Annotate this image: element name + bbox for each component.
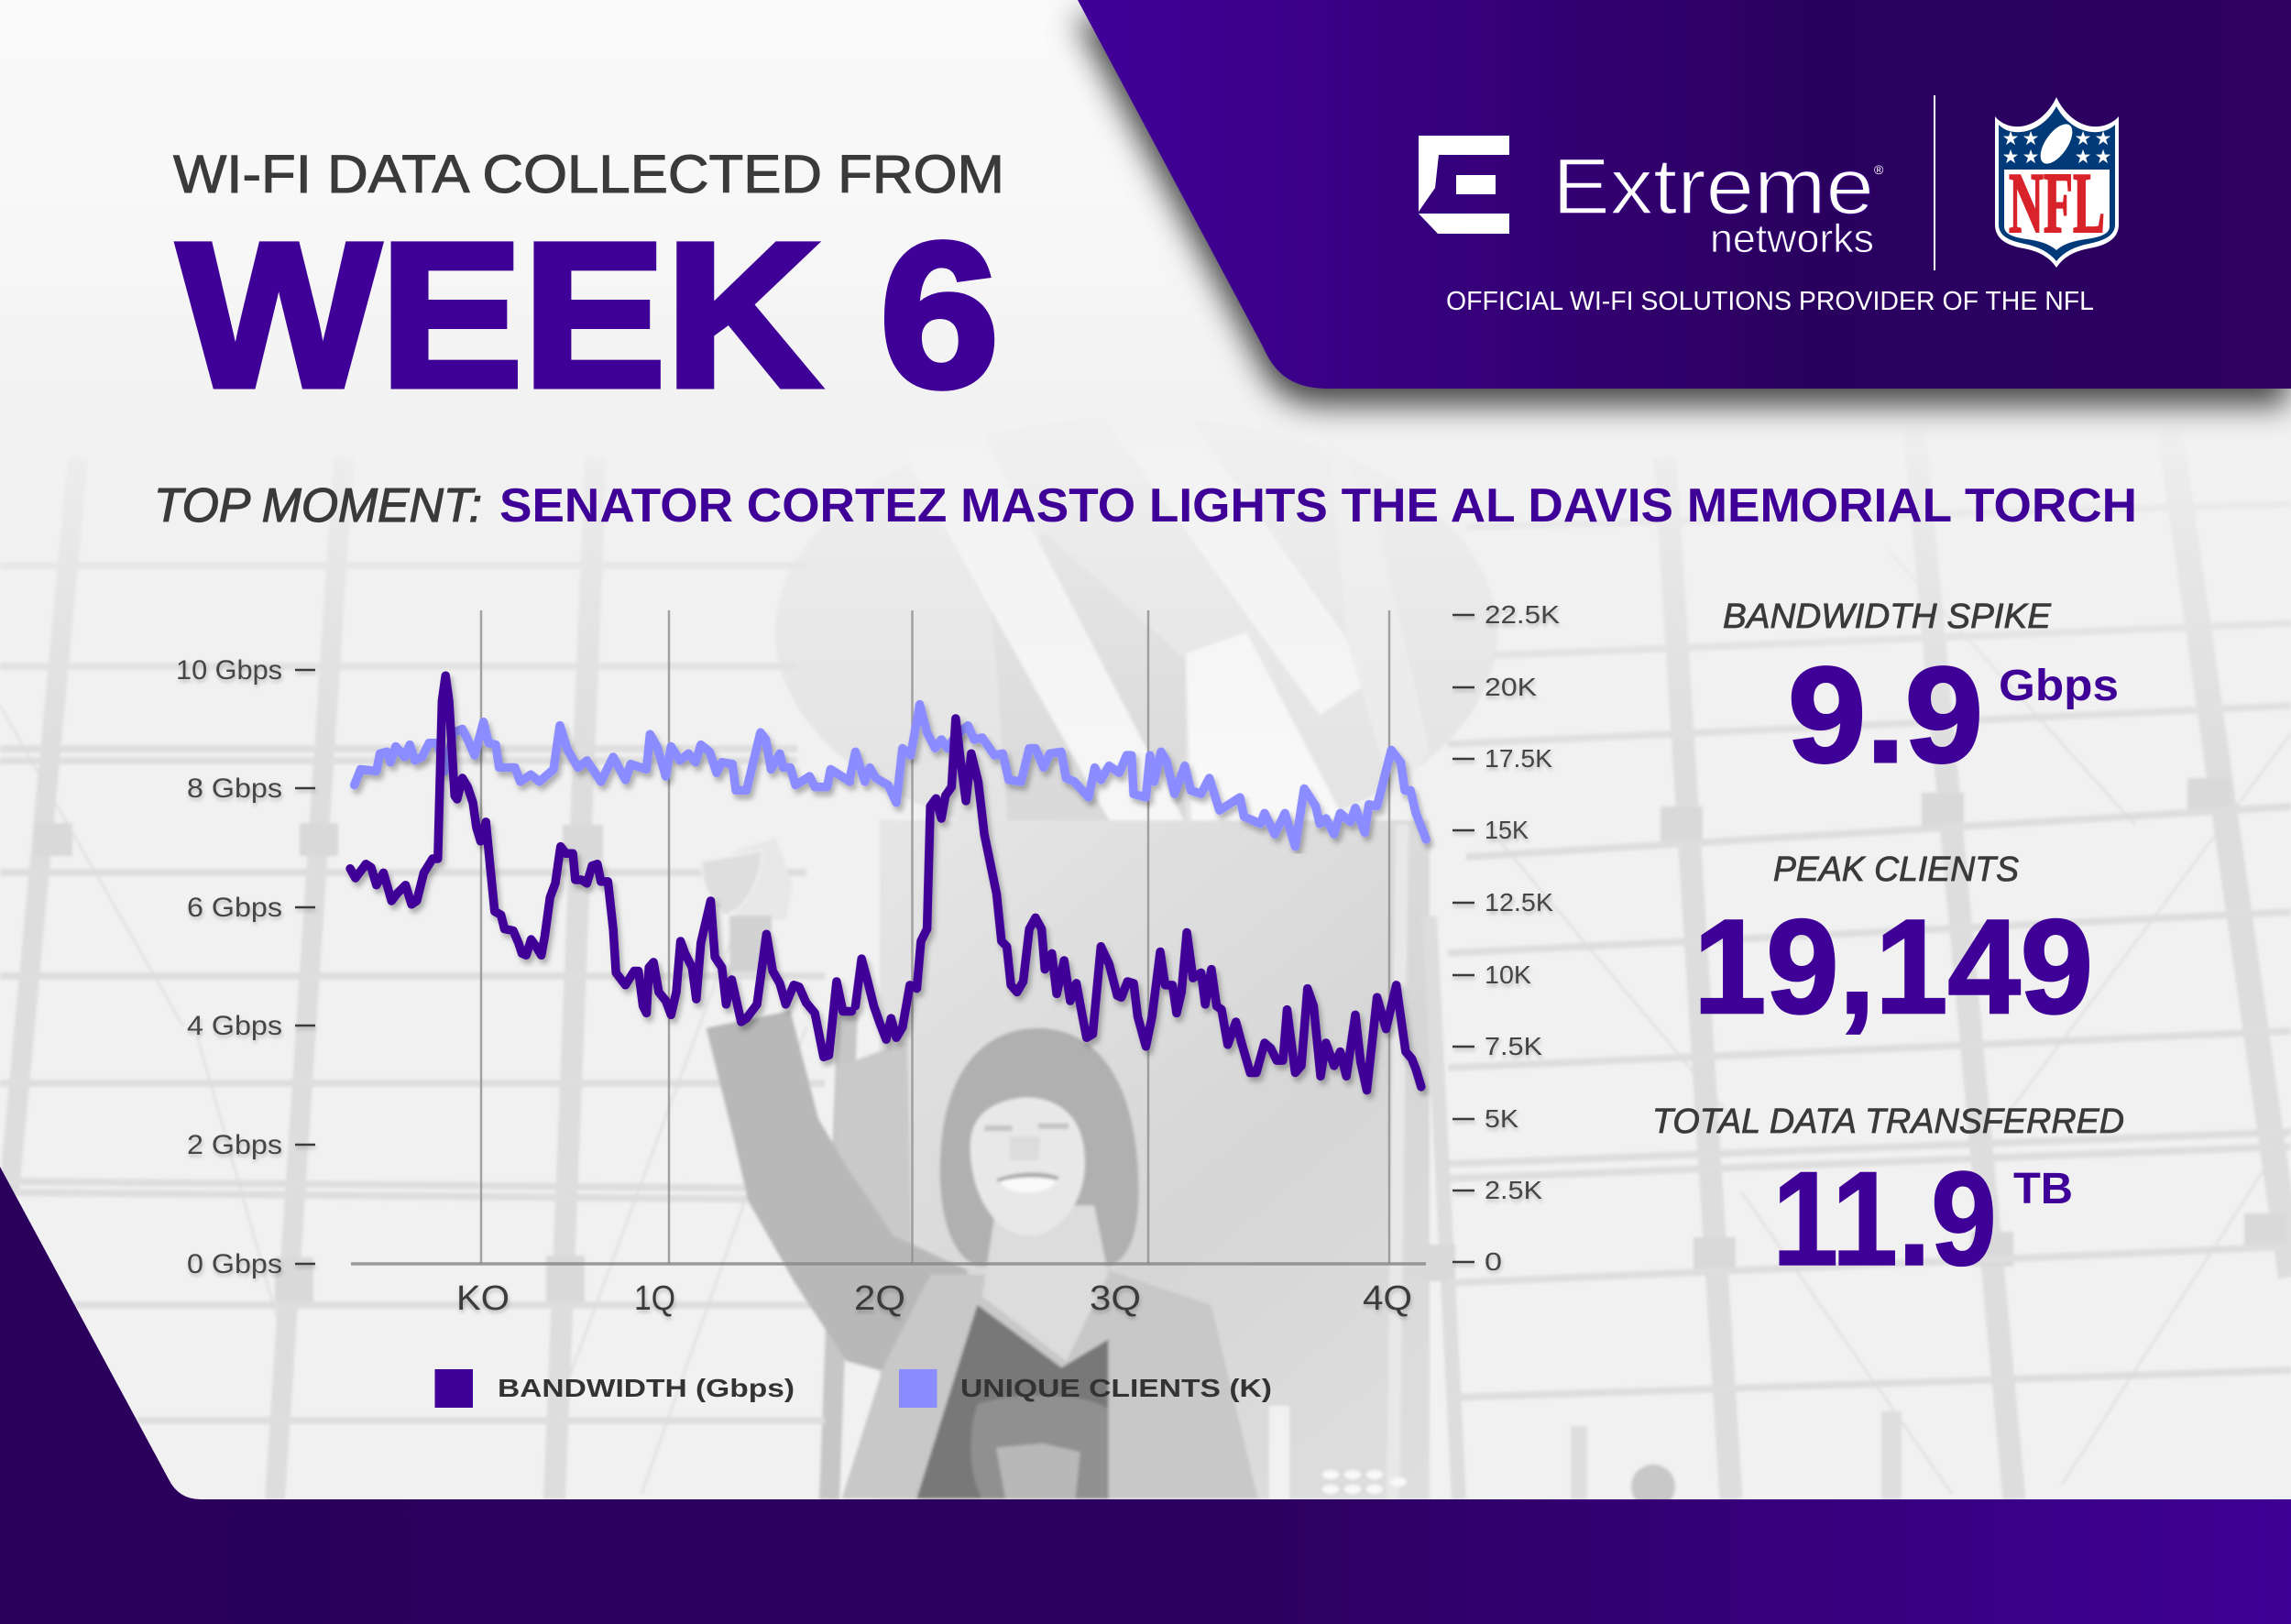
shield white panel bbox=[2004, 170, 2110, 250]
shield stars: ★ bbox=[2022, 128, 2039, 149]
header panel bbox=[1078, 0, 2291, 389]
stat: total data transferred: 11.9 bbox=[1772, 1144, 1997, 1293]
stat: bandwidth spike: 9.9 bbox=[1788, 640, 1983, 791]
shield stars: ★ bbox=[2095, 147, 2111, 168]
icon: football bbox=[2034, 119, 2078, 169]
shield stars: ★ bbox=[2022, 147, 2039, 168]
shield navy field bbox=[1999, 106, 2115, 261]
x axis line bbox=[351, 1262, 1426, 1266]
legend bbox=[434, 1369, 1272, 1408]
logo: Extreme Networks: ® bbox=[1874, 162, 1884, 177]
torch bowl bbox=[775, 412, 1497, 852]
right axis: clients bbox=[1452, 600, 1560, 1276]
right axis: clients: 15K bbox=[1485, 816, 1529, 844]
shield white outline bbox=[1995, 97, 2119, 268]
shield stars: ★ bbox=[2075, 128, 2091, 149]
torch handle bbox=[729, 916, 772, 971]
left axis: Gbps: 0 Gbps bbox=[187, 1249, 282, 1279]
x axis quarter labels: 4Q bbox=[1363, 1279, 1412, 1318]
line series: bandwidth bbox=[350, 675, 1421, 1091]
torch column bbox=[880, 820, 1430, 1499]
stat: bandwidth spike: Gbps bbox=[1999, 662, 2119, 710]
stat: bandwidth spike: BANDWIDTH SPIKE bbox=[1723, 598, 2052, 636]
bottom band and left triangle bbox=[0, 1167, 2291, 1624]
logo divider bbox=[1934, 95, 1935, 270]
header small title: WI-FI DATA COLLECTED FROM bbox=[173, 145, 1004, 204]
top moment headline: SENATOR CORTEZ MASTO LIGHTS THE AL DAVIS MEMORIAL TORCH bbox=[499, 479, 2137, 532]
fist bbox=[734, 838, 793, 920]
shirt bbox=[916, 1305, 1108, 1498]
NFL wordmark: NFL bbox=[2009, 156, 2105, 251]
right axis: clients: 2.5K bbox=[1485, 1176, 1542, 1204]
chart: bandwidth and unique clients over game bbox=[176, 600, 1560, 1408]
main title: WEEK 6 bbox=[178, 201, 999, 430]
top moment headline: TOP MOMENT: bbox=[154, 479, 482, 532]
structural beams bbox=[9, 431, 2291, 1499]
legend: BANDWIDTH (Gbps) bbox=[498, 1374, 795, 1402]
x axis quarter labels: 1Q bbox=[634, 1279, 675, 1318]
dark panel behind the person bbox=[837, 1041, 912, 1266]
right axis: clients: 20K bbox=[1485, 673, 1537, 701]
neck bbox=[982, 1205, 1108, 1361]
shield stars: ★ bbox=[2002, 128, 2019, 149]
x axis quarter labels bbox=[456, 1279, 1412, 1318]
stat: peak clients: 19,149 bbox=[1694, 892, 2093, 1041]
x axis quarter labels: 2Q bbox=[854, 1279, 905, 1318]
stat: total data transferred bbox=[1652, 1103, 2124, 1293]
shield stars bbox=[2002, 128, 2111, 168]
line series: unique clients bbox=[355, 705, 1426, 847]
thin diagonal cables bbox=[0, 550, 2291, 1494]
shield stars: ★ bbox=[2095, 128, 2111, 149]
right axis: clients: 22.5K bbox=[1485, 600, 1560, 629]
hair bbox=[940, 1028, 1139, 1266]
chart quarter gridlines bbox=[481, 610, 1389, 1264]
horizontal roof trusses bbox=[0, 504, 2291, 1421]
logo: Extreme Networks: Extreme bbox=[1552, 143, 1874, 231]
x axis quarter labels: KO bbox=[456, 1279, 510, 1318]
background photo: stadium and torch bbox=[0, 412, 2291, 1509]
stat: peak clients: PEAK CLIENTS bbox=[1773, 850, 2019, 889]
right axis: clients: 0 bbox=[1485, 1247, 1502, 1276]
x axis quarter labels: 3Q bbox=[1090, 1279, 1141, 1318]
stat: total data transferred: TOTAL DATA TRANSFERRED bbox=[1652, 1103, 2124, 1141]
right axis: clients: 5K bbox=[1485, 1104, 1518, 1133]
stat: bandwidth spike bbox=[1723, 598, 2119, 791]
stat: total data transferred: TB bbox=[2013, 1165, 2073, 1213]
left axis: Gbps: 8 Gbps bbox=[187, 774, 282, 804]
stats column bbox=[1652, 598, 2124, 1293]
right axis: clients: 17.5K bbox=[1485, 744, 1552, 773]
right axis: clients: 12.5K bbox=[1485, 888, 1553, 916]
icon: Extreme E mark bbox=[1419, 136, 1509, 234]
raised arm sleeve bbox=[707, 1011, 968, 1387]
jacket bbox=[842, 1270, 1258, 1498]
logo: Extreme Networks bbox=[1419, 136, 1884, 261]
stage lights and props bbox=[1269, 1406, 1902, 1509]
nose shade bbox=[1010, 1136, 1040, 1160]
left axis: Gbps: 2 Gbps bbox=[187, 1130, 282, 1160]
eyes bbox=[984, 1124, 1069, 1131]
left axis: Gbps bbox=[176, 655, 315, 1279]
left axis: Gbps: 10 Gbps bbox=[176, 655, 282, 686]
left axis: Gbps: 4 Gbps bbox=[187, 1011, 282, 1041]
beam brackets bbox=[34, 778, 2286, 1303]
shield stars: ★ bbox=[2002, 147, 2019, 168]
logo: NFL shield bbox=[1995, 97, 2119, 268]
person: senator raising the torch bbox=[702, 838, 1258, 1498]
top fade over the photo bbox=[0, 0, 2291, 779]
smile bbox=[998, 1177, 1057, 1192]
logo: Extreme Networks: networks bbox=[1710, 216, 1874, 261]
shield stars: ★ bbox=[2075, 147, 2091, 168]
shirt emblem bbox=[970, 1395, 1108, 1498]
face bbox=[970, 1097, 1085, 1235]
raiders shield bbox=[702, 850, 762, 916]
right axis: clients: 10K bbox=[1485, 960, 1531, 989]
official provider tagline: OFFICIAL WI-FI SOLUTIONS PROVIDER OF THE NFL bbox=[1446, 287, 2094, 316]
right axis: clients: 7.5K bbox=[1485, 1032, 1542, 1060]
left axis: Gbps: 6 Gbps bbox=[187, 893, 282, 923]
legend: UNIQUE CLIENTS (K) bbox=[960, 1374, 1272, 1402]
